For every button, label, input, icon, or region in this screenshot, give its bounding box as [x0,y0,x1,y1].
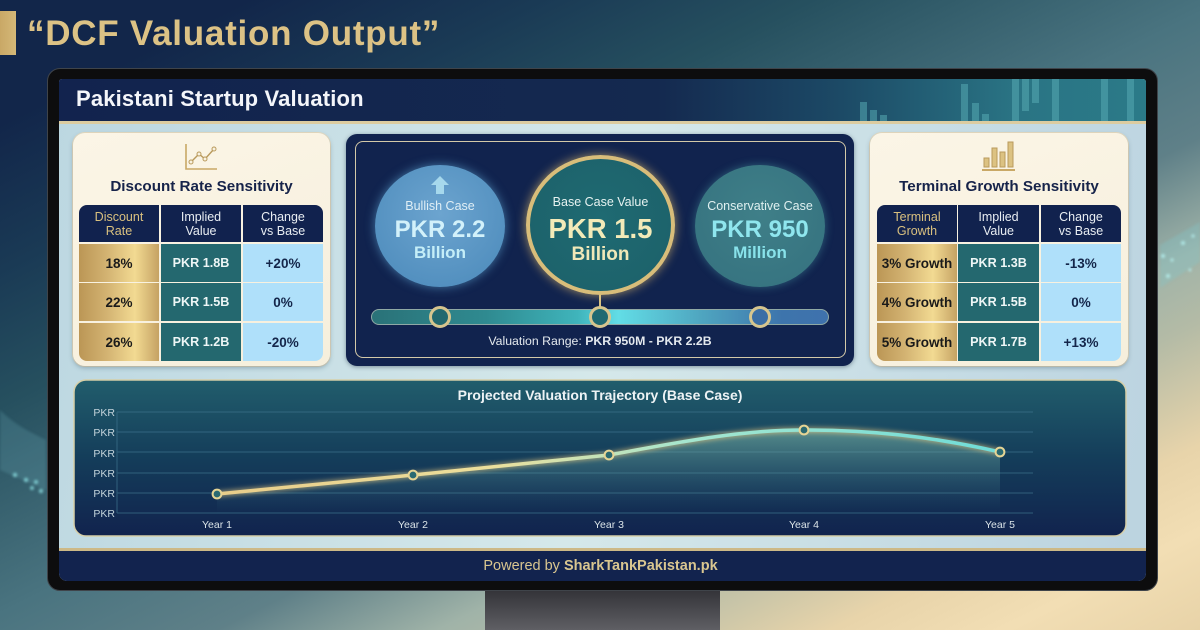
valuation range text: Valuation Range: [488,334,582,348]
chart title: Projected Valuation Trajectory (Base Case) [458,387,742,403]
y axis labels: PKR [93,427,115,439]
row 4% growth: 4% Growth [882,294,952,310]
footer text: SharkTankPakistan.pk [564,558,718,574]
header: discount rate: Discount [95,210,143,224]
value 1.5B [161,283,241,321]
value 1.5B [958,283,1039,321]
screen [59,79,1146,581]
header: change vs base: Change [261,210,305,224]
panel: terminal growth sensitivity [870,133,1128,366]
header: implied value: Value [983,224,1014,238]
area under line [217,430,1000,513]
conservative unit: Million [733,243,787,262]
y axis labels [93,407,115,520]
header: change vs base: vs Base [1059,224,1103,238]
grid lines [117,412,1033,513]
header: implied value: Value [185,224,217,238]
row 3% growth [877,244,957,282]
conservative value: PKR 950 [711,216,809,243]
icon: up arrow [431,176,449,194]
header: change vs base: vs Base [261,224,305,238]
row 3% growth: 3% Growth [882,256,952,270]
line glow [217,430,1000,494]
row 5% growth: 5% Growth [882,334,952,350]
value 1.7B [958,323,1039,361]
sensitivity table [877,205,1121,361]
chart background [74,380,1126,536]
x axis labels [202,519,1015,531]
base case circle [526,155,675,295]
header: discount rate: Rate [106,224,132,238]
change +13%: +13% [1064,334,1098,350]
row 26%: 26% [105,334,133,350]
icon: line chart [185,144,217,170]
x axis labels: Year 4 [789,519,819,531]
header: implied value [958,205,1039,242]
y axis labels: PKR [93,468,115,480]
slider knob: conservative low [429,306,451,328]
x axis labels: Year 2 [398,519,428,531]
trajectory line [217,430,1000,494]
panel heading: Discount Rate Sensitivity [110,178,293,194]
value 1.3B: PKR 1.3B [970,256,1027,270]
slider knob: base [589,306,611,328]
change -20%: -20% [267,334,299,350]
value 1.5B: PKR 1.5B [173,295,229,309]
range slider [371,309,829,325]
icon: bar chart [982,142,1015,171]
bullish unit: Billion [414,243,466,262]
panel heading: Terminal Growth Sensitivity [899,178,1099,194]
base label: Base Case Value [553,195,648,209]
data points [213,426,1004,498]
y axis labels: PKR [93,488,115,500]
value 1.8B [161,244,241,282]
valuation range text: PKR 950M - PKR 2.2B [585,334,712,348]
value 1.7B: PKR 1.7B [970,335,1027,349]
y axis labels: PKR [93,508,115,520]
header: terminal growth [877,205,957,242]
bullish value: PKR 2.2 [395,216,485,243]
header: change vs base [1041,205,1121,242]
value 1.5B: PKR 1.5B [970,295,1027,309]
change 0% [243,283,323,321]
sensitivity table [79,205,323,361]
change +13% [1041,323,1121,361]
base case connector [599,292,601,312]
y axis labels: PKR [93,448,115,460]
change -13% [1041,244,1121,282]
panel: projected valuation trajectory chart [73,379,1127,537]
header: terminal growth: Growth [897,224,937,238]
header bar [59,79,1146,124]
row 5% growth [877,323,957,361]
change 0%: 0% [1071,294,1091,310]
row 22% [79,283,159,321]
y axis labels: PKR [93,407,115,419]
bullish case circle [375,165,505,287]
panel: valuation cases [346,134,854,366]
header: discount rate [79,205,159,242]
footer bar [59,548,1146,581]
change +20%: +20% [266,256,300,270]
row 22%: 22% [105,294,133,310]
change +20% [243,244,323,282]
footer text [483,558,718,574]
bullish label: Bullish Case [405,199,475,213]
x axis labels: Year 1 [202,519,232,531]
value 1.8B: PKR 1.8B [173,256,229,270]
header: terminal growth: Terminal [893,210,941,224]
header: implied value: Implied [181,210,221,224]
x axis labels: Year 5 [985,519,1015,531]
title: “DCF Valuation Output” [27,14,440,53]
row 18%: 18% [105,256,133,270]
decorative gold title marker [0,11,16,55]
header: change vs base [243,205,323,242]
monitor stand [485,590,720,630]
panel: discount rate sensitivity [73,133,330,366]
monitor [47,68,1158,591]
change -13%: -13% [1065,256,1097,270]
value 1.3B [958,244,1039,282]
conservative case circle [695,165,825,287]
header: change vs base: Change [1059,210,1103,224]
value 1.2B [161,323,241,361]
valuation range text [488,334,712,348]
row 26% [79,323,159,361]
change 0%: 0% [273,294,293,310]
header: implied value [161,205,241,242]
change 0% [1041,283,1121,321]
x axis labels: Year 3 [594,519,624,531]
value 1.2B: PKR 1.2B [173,335,229,349]
slider knob: high [749,306,771,328]
inner border [355,141,846,358]
row 18% [79,244,159,282]
base value: PKR 1.5 [549,213,652,244]
header: implied value: Implied [978,210,1019,224]
header title: Pakistani Startup Valuation [76,86,364,111]
footer text: Powered by [483,558,560,574]
change -20% [243,323,323,361]
row 4% growth [877,283,957,321]
base unit: Billion [571,244,630,265]
conservative label: Conservative Case [707,199,813,213]
